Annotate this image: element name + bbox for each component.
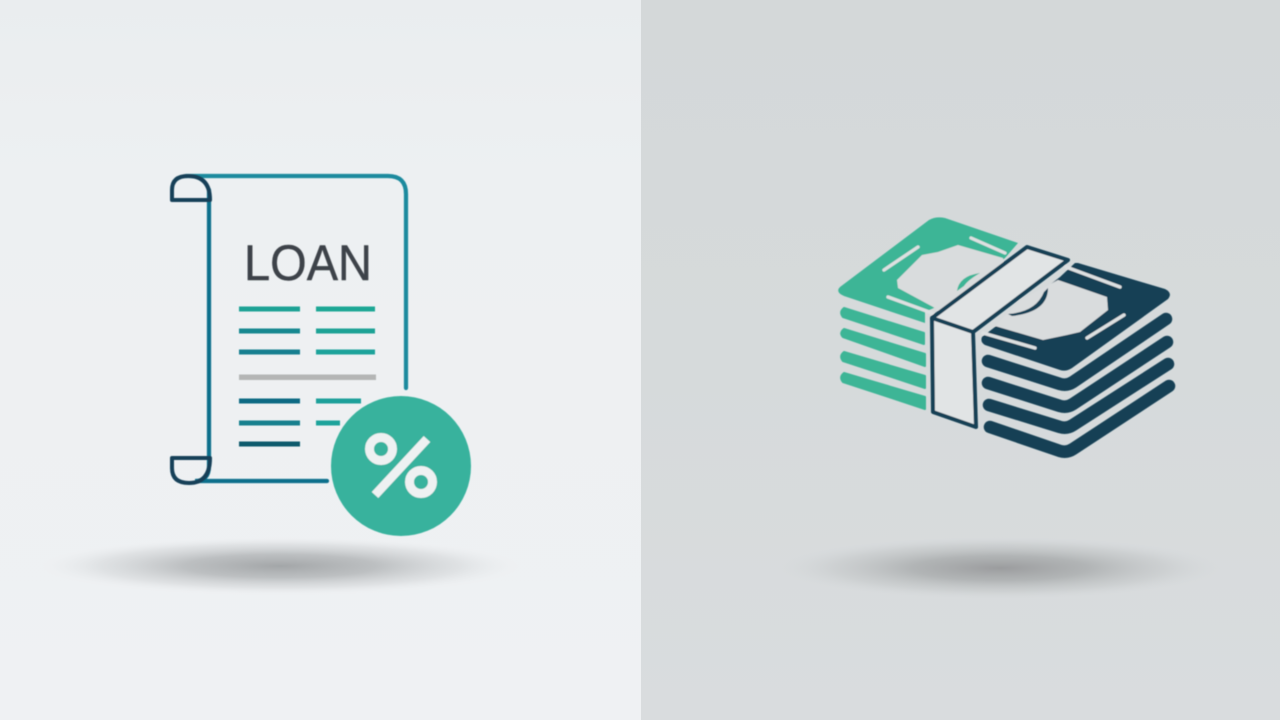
text lines lower group — [239, 401, 361, 444]
document outline — [186, 176, 406, 388]
loan heading: LOAN — [244, 235, 372, 291]
dark note layers — [988, 319, 1169, 452]
divider line — [239, 374, 376, 380]
green banknote top — [838, 217, 1018, 323]
text lines upper group — [239, 309, 375, 352]
paper band — [932, 247, 1068, 427]
panel: left background — [0, 0, 641, 720]
top scroll curl — [172, 176, 210, 200]
dark banknote top — [981, 263, 1170, 371]
shadow under loan document — [40, 537, 520, 595]
icon: loan document — [172, 176, 471, 536]
green note layers — [841, 308, 925, 409]
icon: cash stack — [838, 217, 1170, 452]
shadow under cash stack — [780, 537, 1220, 599]
percent badge — [331, 396, 471, 536]
bottom scroll curl — [172, 458, 210, 483]
panel: right background — [641, 0, 1280, 720]
